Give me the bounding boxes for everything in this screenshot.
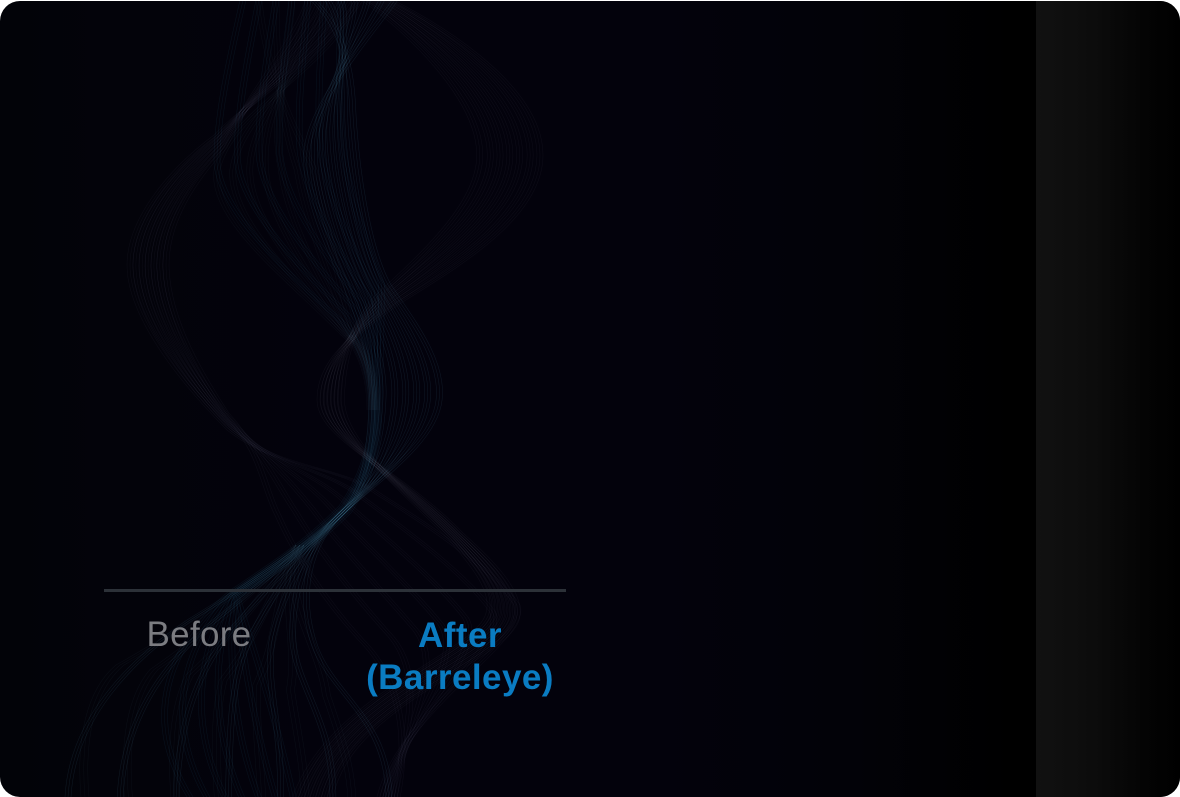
label: After (Barreleye): After: [418, 616, 502, 655]
wave ribbon: main strand: [65, 0, 443, 797]
wave ribbon: upper mesh: [214, 0, 380, 410]
label: After (Barreleye): [366, 616, 554, 697]
panel: right side strip: [1036, 1, 1180, 797]
label: After (Barreleye): (Barreleye): [366, 658, 554, 697]
wave ribbon: right lobe: [293, 0, 543, 797]
label: Before: Before: [147, 615, 251, 654]
wave ribbon: lower mesh: [80, 545, 356, 797]
wave ribbon: left lobe: [127, 0, 521, 797]
divider line: [104, 589, 566, 592]
wave ribbon: teal band: [162, 0, 384, 797]
